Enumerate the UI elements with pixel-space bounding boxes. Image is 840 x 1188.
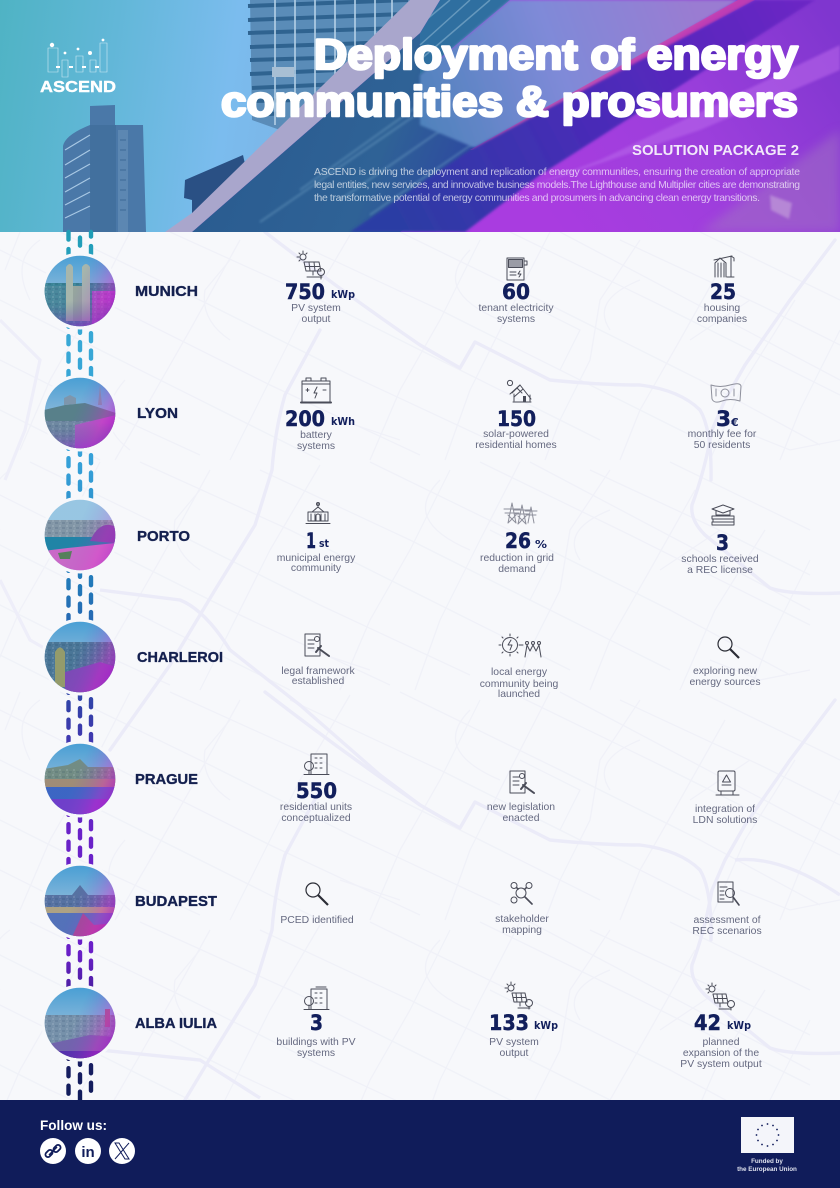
stat: LDN: integration of [695,804,755,815]
icon: books and graduation cap [712,505,734,525]
stat: 3 euro: € [730,416,739,429]
stat: 133 kWp: output [500,1048,529,1059]
stat: 42 kWp: PV system output [680,1059,762,1070]
stat: legal framework [281,634,355,687]
icon: electricity meter [507,258,527,280]
stat: 42 kWp [680,983,762,1070]
stat: 1st [277,502,356,574]
city name: ALBA IULIA [135,1015,217,1032]
city name: PRAGUE [135,771,198,788]
stat: 3 schools: 3 [716,531,729,555]
eu flag [741,1117,794,1153]
title: communities & prosumers [221,78,798,126]
stat: 26 percent: reduction in grid [480,553,554,564]
stat: 25: housing [704,303,740,314]
photo: Porto [42,496,118,574]
icon: x [109,1138,135,1164]
intro paragraph: ASCEND is driving the deployment and replication of energy communities, ensuring the creation of appropriate [314,167,800,178]
stat: assessment: REC scenarios [692,926,762,937]
tower top centre [248,0,412,130]
follow us heading: Follow us: [40,1118,107,1133]
stat: 750 kWp: output [302,314,331,325]
stat: 3 schools: a REC license [687,565,753,576]
stat: local energy community: local energy [491,667,548,678]
stat: 60: 60 [502,280,530,304]
stat: LDN [693,771,757,826]
city name: PORTO [137,528,190,545]
photo: Munich [42,252,118,330]
timeline dashes [68,232,91,1100]
stat: 3 euro: 50 residents [694,440,750,451]
icon: municipal building [306,502,330,524]
photo: Alba Iulia [42,984,118,1062]
stat: local energy community: community being [480,679,558,690]
stat: 25 [697,256,747,325]
stat: 750 kWp: 750 [285,280,325,304]
stat: 200 kWh: kWh [331,415,355,428]
stat: stakeholder mapping [495,882,549,936]
icon: solar house [507,380,531,402]
stat: assessment [692,882,762,937]
stat: legal framework: established [292,676,344,687]
row: Lyon [42,374,757,452]
stat: 550: residential units [280,802,352,813]
city name: MUNICH [135,283,198,300]
stat: 42 kWp: 42 [694,1011,721,1035]
icon: report and magnifier [718,882,739,905]
stat: local energy community [480,634,558,700]
intro paragraph: legal entities, new services, and innovative business models.The Lighthouse and Multiplier cities are demonstrating [314,180,800,191]
stat: 3 buildings: buildings with PV [276,1037,356,1048]
stat: new energy sources [689,637,761,688]
city name: CHARLEROI [137,649,223,666]
icon: legal document and gavel [510,771,534,793]
icon: electric cabinet [716,771,739,795]
icon: battery [301,378,331,402]
stat: 26 percent [480,503,554,575]
stat: new legislation: enacted [503,813,540,824]
stat: 25: companies [697,314,747,325]
stat: 150: 150 [497,407,536,431]
icon: building under crane [714,256,734,277]
stat: new energy sources: energy sources [689,677,761,688]
footer [0,1100,840,1188]
title: Deployment of energy [314,31,798,79]
intro paragraph: the transformative potential of energy communities and prosumers in advancing clean energy transitions. [314,193,760,204]
icon: city building with tree [304,754,329,774]
icon: banknote [711,384,741,402]
icon: solar panel and bulb [297,251,324,279]
stat: 133 kWp [489,982,558,1059]
stat: 750 kWp: PV system [291,303,341,314]
stat: 200 kWh: battery [300,430,333,441]
stat: PCED: PCED identified [280,915,354,926]
logo wordmark: ASCEND [40,79,116,96]
stat: 750 kWp [285,251,355,325]
stat: 133 kWp: 133 [489,1011,529,1035]
icon: linkedin: in [81,1144,95,1161]
stat: local energy community: launched [498,689,540,700]
stat: 133 kWp: kWp [534,1019,558,1032]
stat: stakeholder mapping: stakeholder [495,914,549,925]
stat: 550: 550 [296,779,337,803]
photo: Lyon [42,374,118,452]
icon: linkedin [75,1138,101,1164]
stat: PCED [280,883,354,926]
photo: Budapest [42,862,118,940]
logo ascend [40,39,116,96]
stat: 750 kWp: kWp [331,288,355,301]
row: Munich [42,251,747,330]
stat: 42 kWp: planned [703,1037,740,1048]
funded by: the European Union [737,1166,797,1173]
stat: LDN: LDN solutions [693,815,757,826]
stat: 200 kWh: 200 [285,407,325,431]
building left [63,105,146,232]
stat: 150: solar-powered [483,429,549,440]
building lower centre [184,155,244,232]
stat: legal framework: legal framework [281,666,355,677]
stat: new legislation [487,771,555,824]
stat: 1st: st [319,537,329,550]
icon: magnifier [306,883,328,905]
stat: 60: systems [497,314,535,325]
stat: 150: residential homes [475,440,557,451]
stat: 1st: municipal energy [277,553,356,564]
stat: 3 schools [681,505,759,576]
row: Prague [42,740,757,826]
stat: 3 euro [688,384,757,451]
row: Charleroi [42,618,761,700]
streak field [165,0,840,232]
stat: 550 [280,754,352,824]
row: Alba Iulia [42,982,762,1070]
stat: assessment: assessment of [694,915,761,926]
stat: 150 [475,380,557,451]
stat: new legislation: new legislation [487,802,555,813]
stat: 42 kWp: expansion of the [683,1048,759,1059]
stat: 26 percent: demand [498,564,536,575]
stat: 3 euro: 3 [716,407,731,431]
stat: 200 kWh: systems [297,441,335,452]
stat: 3 buildings: systems [297,1048,335,1059]
city name: BUDAPEST [135,893,217,910]
icon: legal document and gavel [305,634,329,656]
icon: energy and people [499,634,541,657]
row: Porto [42,496,759,576]
stat: 60: tenant electricity [478,303,554,314]
subtitle: SOLUTION PACKAGE 2 [632,142,799,159]
header banner [0,0,840,232]
icon: link [40,1138,66,1164]
title [221,31,798,126]
icon: solar panel and bulb [505,982,532,1009]
stat: 26 percent: % [535,538,547,551]
stat: 200 kWh [285,378,355,452]
icon: city building with tree [304,987,329,1010]
stat: 3 buildings: 3 [310,1011,323,1035]
stat: 3 euro: monthly fee for [688,429,757,440]
intro paragraph [314,167,800,204]
icon: magnifier [718,637,739,658]
icon: solar panel and bulb [706,983,734,1010]
stat: 60 [478,258,554,325]
stat: 133 kWp: PV system [489,1037,539,1048]
funded by: Funded by [751,1158,783,1165]
stat: 26 percent: 26 [505,529,531,553]
stat: 25: 25 [710,280,736,304]
photo: Charleroi [42,618,118,696]
icon: stakeholder network [511,882,532,904]
stat: 550: conceptualized [281,813,351,824]
stat: 1st: community [291,563,342,574]
stat: 3 buildings [276,987,356,1059]
stat: 42 kWp: kWp [727,1019,751,1032]
row: Budapest [42,862,762,940]
stat: new energy sources: exploring new [693,666,758,677]
city name: LYON [137,405,178,422]
stat: 1st: 1 [306,529,316,553]
funded by [737,1158,797,1173]
photo: Prague [42,740,118,818]
stat: 3 schools: schools received [681,554,759,565]
stat: stakeholder mapping: mapping [502,925,542,936]
icon: power pylons [504,503,537,524]
